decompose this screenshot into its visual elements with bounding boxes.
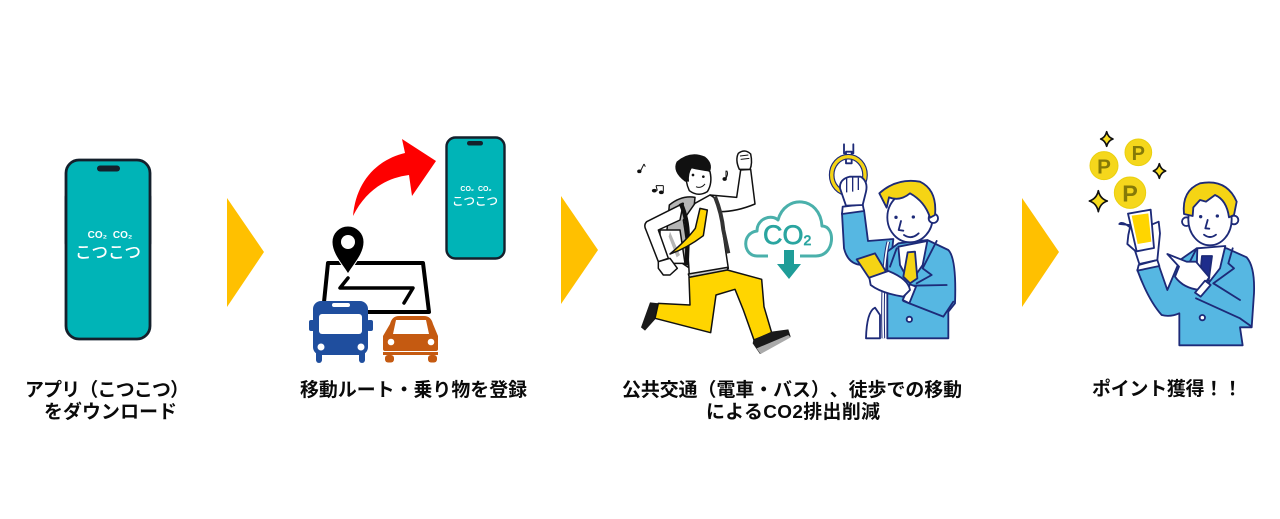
head — [686, 167, 711, 194]
lapel lines — [890, 241, 937, 283]
step 2: red curved arrow — [353, 139, 436, 216]
pointing hand — [1167, 254, 1209, 290]
coin letters: P — [1097, 155, 1111, 178]
back shoe — [641, 302, 659, 331]
shirt — [1197, 246, 1225, 283]
arrow 3 — [1022, 198, 1059, 307]
step 3 caption: 公共交通（電車・バス）、徒歩での移動 — [622, 379, 962, 401]
forearm lines and button — [1196, 283, 1252, 327]
step 2: phone with app logo — [446, 138, 504, 258]
face details — [692, 174, 705, 178]
lapels — [1187, 248, 1234, 283]
backpack and book — [667, 197, 695, 267]
cuff and hand on phone — [903, 284, 916, 303]
cuff — [1137, 260, 1159, 271]
hanging strap and ring — [832, 144, 865, 193]
fist — [737, 151, 752, 169]
step 2: location pin — [332, 226, 364, 274]
belt — [688, 267, 728, 277]
step 2 caption: 移動ルート・乗り物を登録 — [300, 379, 527, 401]
step 3: CO2 cloud icon: 2 — [804, 232, 812, 248]
step 2: phone with app logo: CO₂ CO₂ — [460, 186, 492, 193]
head — [1182, 217, 1191, 226]
step 3: standing commuter illustration — [832, 144, 955, 338]
face — [1199, 215, 1202, 218]
step 1 caption: アプリ（こつこつ） — [25, 379, 189, 401]
tie — [670, 208, 707, 254]
coin letters: P — [1132, 143, 1145, 165]
left hand — [658, 258, 677, 275]
shirt — [898, 241, 927, 283]
raised sleeve — [842, 210, 893, 270]
backpack straps — [681, 203, 688, 265]
hair — [675, 154, 711, 182]
gripping hand — [840, 177, 867, 206]
bag strap and bag — [883, 242, 888, 338]
raised hand — [1119, 222, 1160, 264]
step 3 caption: によるCO2排出削減 — [706, 400, 880, 423]
coin letters — [1097, 143, 1145, 206]
hair — [879, 181, 935, 218]
head — [887, 192, 933, 242]
raised arm — [710, 169, 755, 212]
step 1 caption: をダウンロード — [44, 400, 177, 423]
trousers — [655, 270, 772, 340]
step 1: phone with app logo: こつこつ — [75, 244, 141, 262]
shirt torso — [683, 195, 728, 277]
step 2: phone with app logo: こつこつ — [452, 196, 498, 208]
music notes — [638, 164, 728, 194]
arrow 1 — [227, 198, 264, 307]
step 2: car icon — [383, 316, 438, 362]
step 4 caption: ポイント獲得！！ — [1092, 377, 1242, 400]
coins — [1090, 139, 1152, 208]
jacket — [1137, 248, 1254, 345]
step 3: CO2 cloud icon: CO — [763, 220, 804, 250]
tie — [903, 252, 917, 283]
jacket — [887, 240, 955, 338]
step 3: CO2 cloud icon — [746, 202, 832, 279]
step 2: route map — [323, 263, 429, 312]
step 4: points and businessman illustration — [1089, 132, 1254, 345]
cuff — [842, 204, 864, 214]
phone — [1128, 210, 1154, 251]
step 3: running man illustration — [638, 151, 791, 354]
coin letters: P — [1122, 180, 1138, 206]
step 2: bus icon — [309, 301, 373, 363]
hair — [1184, 182, 1237, 217]
arrow 2 — [561, 196, 598, 304]
step 3 caption — [622, 379, 962, 423]
phone — [857, 253, 886, 278]
pointing cuff — [1195, 281, 1211, 297]
face — [894, 216, 898, 219]
step 1: phone with app logo: CO₂ CO₂ — [88, 230, 132, 241]
step 1: phone with app logo — [64, 160, 152, 339]
left arm — [645, 203, 683, 262]
sparkles — [1089, 132, 1166, 212]
tie — [1200, 256, 1212, 281]
step 1 caption — [25, 379, 189, 423]
front shoe — [753, 329, 791, 354]
